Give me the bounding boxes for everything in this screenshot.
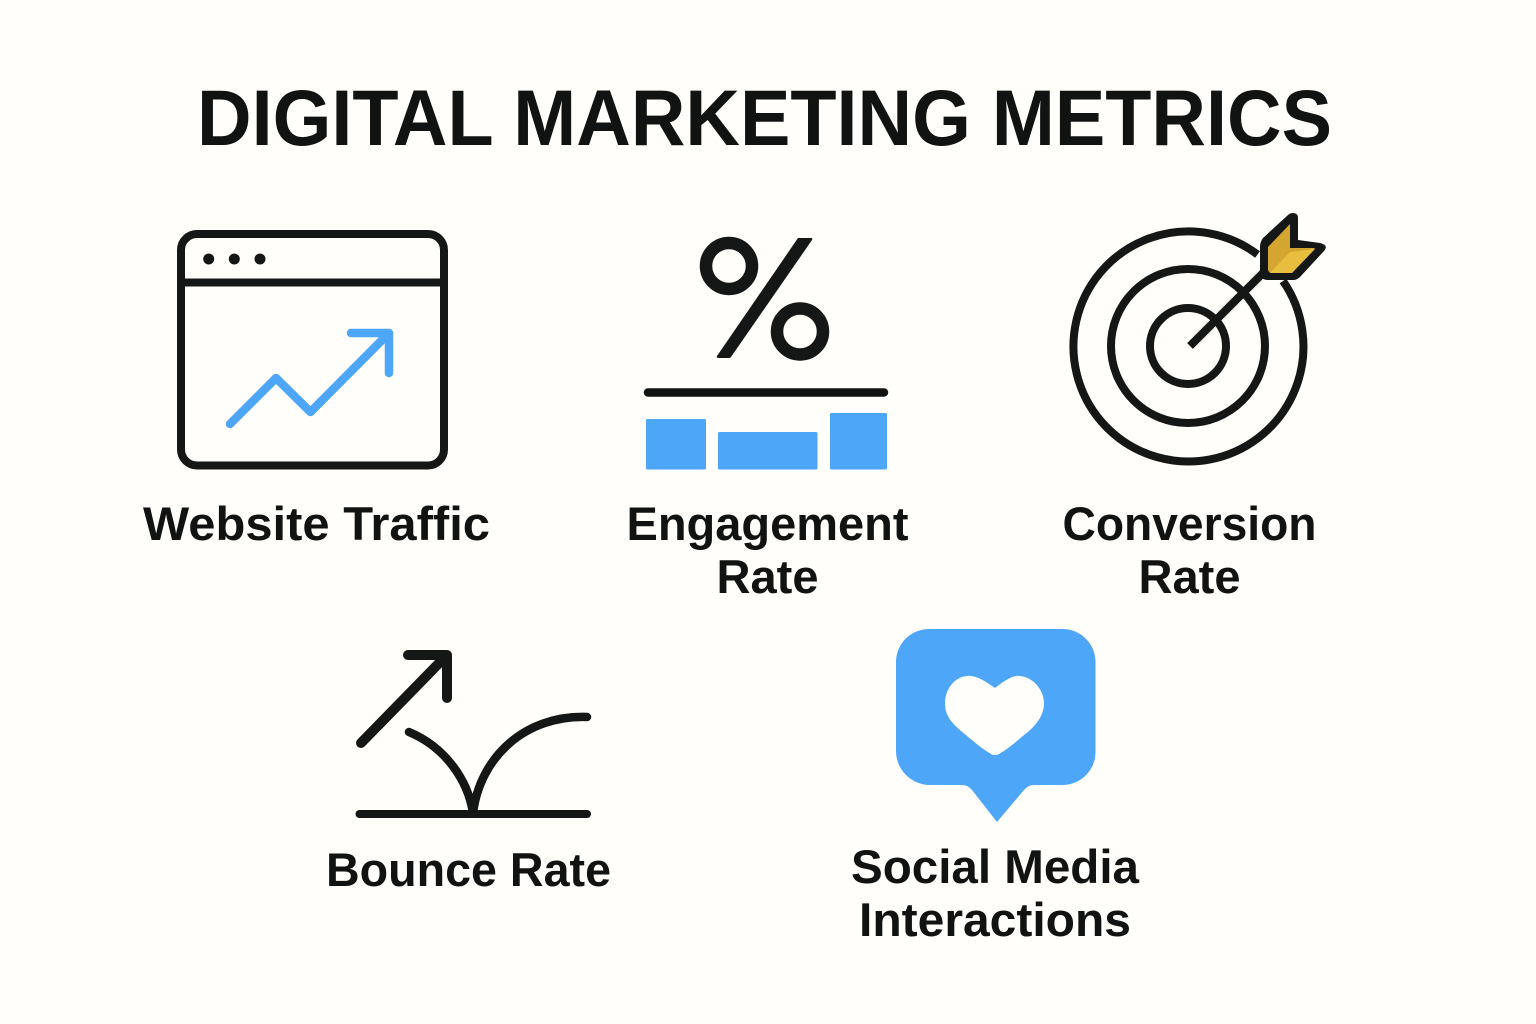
label: conversion rate: Conversion [1062,497,1316,550]
icon: percent sign above bars [646,238,887,470]
panel: engagement rate [626,238,909,603]
icon: target with gold arrow [1073,213,1326,461]
label: engagement rate: Engagement [626,497,909,550]
icon: bouncing arrow over ground line [360,655,587,814]
panel: website traffic [143,234,490,550]
icon: speech bubble with heart [896,629,1096,822]
panel: bounce rate [326,655,611,896]
label: social media interactions: Social Media [851,840,1140,893]
panel: social media interactions [851,629,1140,946]
label: conversion rate: Rate [1138,550,1240,603]
label: engagement rate: Rate [716,550,818,603]
label: social media interactions: Interactions [859,893,1131,946]
title: DIGITAL MARKETING METRICS [197,73,1332,162]
label: website traffic: Website Traffic [143,497,490,550]
panel: conversion rate [1062,213,1326,603]
icon: browser window with rising trend line [181,234,444,466]
label: bounce rate: Bounce Rate [326,843,611,896]
